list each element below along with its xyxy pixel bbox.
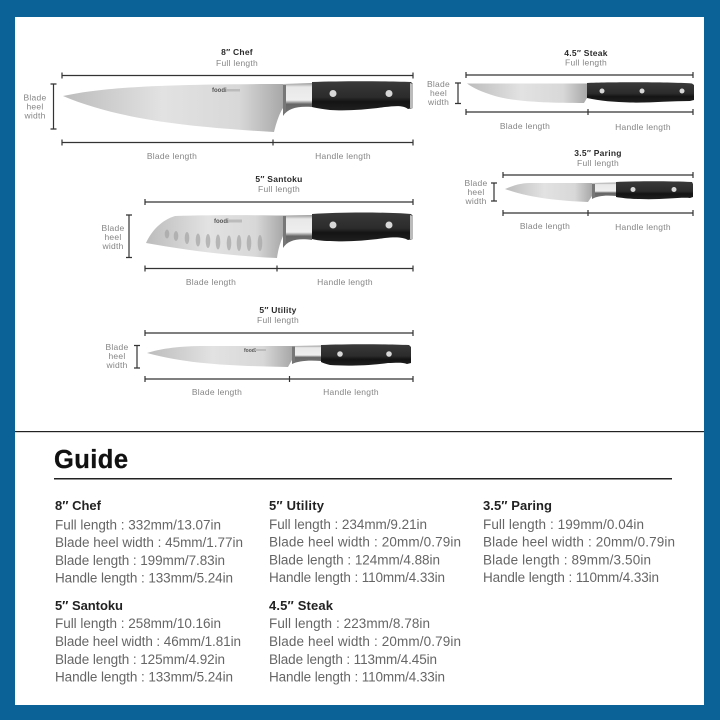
- guide block: 5" Santoku: Blade length : 125mm/4.92in: [55, 652, 225, 667]
- guide block: 5" Santoku: Handle length : 133mm/5.24in: [55, 670, 233, 684]
- label: blade heel width: heel: [108, 351, 126, 361]
- label: full length: Full length: [565, 58, 607, 68]
- dimension: blade and handle length: [145, 376, 413, 382]
- knife diagram: 5" Utility: [105, 305, 413, 397]
- title: 5" Utility: 5″ Utility: [259, 305, 297, 315]
- dimension: full length: [145, 199, 413, 205]
- dimension: full length: [466, 72, 693, 78]
- title: 4.5" Steak: 4.5″ Steak: [564, 48, 608, 58]
- label: blade heel width: Blade: [106, 342, 129, 352]
- guide block: 3.5" Paring: Full length : 199mm/0.04in: [483, 517, 644, 532]
- dimension: full length: [503, 172, 693, 178]
- guide block: 3.5" Paring: [483, 498, 675, 585]
- dimension: blade heel width: [50, 84, 56, 129]
- guide block: 4.5" Steak: Full length : 223mm/8.78in: [269, 616, 430, 631]
- guide block: 3.5" Paring: Blade heel width : 20mm/0.79in: [483, 534, 675, 550]
- knife diagram: 3.5" Paring: [464, 148, 693, 232]
- label: blade heel width: Blade: [102, 223, 125, 233]
- guide block: 5" Utility: Blade length : 124mm/4.88in: [269, 552, 440, 568]
- label: blade heel width: Blade: [464, 178, 488, 188]
- label: blade heel width: heel: [467, 187, 485, 197]
- guide block: 5" Santoku: Blade heel width : 46mm/1.81in: [55, 634, 241, 649]
- utility knife illustration: foodi: [244, 348, 257, 354]
- guide block: 5" Utility: Handle length : 110mm/4.33in: [269, 570, 445, 585]
- paring knife illustration: [505, 181, 693, 202]
- label: blade heel width: heel: [430, 88, 447, 98]
- label: blade heel width: width: [101, 241, 124, 251]
- guide block: 8" Chef: 8″ Chef: [55, 498, 102, 513]
- guide block: 8" Chef: Full length : 332mm/13.07in: [55, 518, 221, 532]
- dimension: full length: [62, 72, 413, 78]
- dimension: blade and handle length: [145, 266, 413, 272]
- label: full length: Full length: [216, 58, 258, 68]
- title: 8" Chef: 8″ Chef: [221, 47, 253, 57]
- label: blade heel width: [23, 92, 47, 120]
- guide block: 5" Santoku: [55, 598, 241, 684]
- guide block: 4.5" Steak: Handle length : 110mm/4.33in: [269, 670, 445, 684]
- title: 5" Santoku: 5″ Santoku: [255, 174, 303, 184]
- guide block: 8" Chef: Handle length : 133mm/5.24in: [55, 570, 233, 586]
- heading rule: [54, 478, 672, 480]
- label: blade heel width: width: [464, 196, 487, 206]
- guide block: 8" Chef: Blade heel width : 45mm/1.77in: [55, 535, 243, 550]
- dimension: blade and handle length: [503, 210, 693, 216]
- label: handle length: Handle length: [317, 277, 373, 287]
- label: blade length: Blade length: [520, 221, 570, 231]
- heading: Guide: Guide: [54, 446, 128, 474]
- guide block: 5" Santoku: Full length : 258mm/10.16in: [55, 616, 221, 631]
- label: blade heel width: width: [427, 97, 449, 107]
- label: blade heel width: [101, 223, 125, 251]
- label: blade heel width: heel: [104, 232, 122, 242]
- label: full length: Full length: [577, 158, 619, 168]
- label: blade length: Blade length: [186, 277, 236, 287]
- label: blade heel width: [464, 178, 488, 206]
- santoku knife illustration: foodi: [214, 219, 229, 225]
- chef knife illustration: foodi: [212, 88, 227, 94]
- label: handle length: Handle length: [315, 151, 371, 161]
- title: 3.5" Paring: 3.5″ Paring: [574, 148, 622, 158]
- label: full length: Full length: [257, 315, 299, 325]
- utility knife illustration: [147, 344, 411, 367]
- guide block: 5" Utility: Blade heel width : 20mm/0.79in: [269, 534, 461, 550]
- label: blade heel width: Blade: [427, 79, 450, 89]
- dimension: blade heel width: [126, 215, 132, 258]
- dimension: blade heel width: [491, 183, 497, 201]
- guide block: 4.5" Steak: Blade heel width : 20mm/0.79in: [269, 634, 461, 649]
- dimension: blade and handle length: [62, 140, 413, 146]
- label: blade heel width: width: [23, 110, 46, 120]
- guide block: 3.5" Paring: Blade length : 89mm/3.50in: [483, 552, 651, 568]
- label: handle length: Handle length: [615, 222, 671, 232]
- guide block: 4.5" Steak: Blade length : 113mm/4.45in: [269, 652, 437, 667]
- label: blade heel width: Blade: [24, 92, 47, 102]
- label: blade length: Blade length: [147, 151, 197, 161]
- guide block: 4.5" Steak: [269, 598, 461, 684]
- label: full length: Full length: [258, 184, 300, 194]
- label: blade heel width: width: [105, 360, 128, 370]
- steak knife illustration: [467, 82, 694, 103]
- label: handle length: Handle length: [323, 387, 379, 397]
- dimension: blade and handle length: [466, 109, 693, 115]
- label: blade heel width: [105, 342, 129, 370]
- guide block: 5" Utility: [269, 498, 461, 585]
- label: blade heel width: heel: [26, 102, 44, 112]
- guide block: 3.5" Paring: Handle length : 110mm/4.33in: [483, 570, 659, 585]
- guide block: 8" Chef: Blade length : 199mm/7.83in: [55, 553, 225, 568]
- chef knife illustration: [63, 81, 413, 132]
- guide block: 4.5" Steak: 4.5″ Steak: [269, 598, 334, 613]
- guide block: 3.5" Paring: 3.5″ Paring: [483, 498, 552, 513]
- label: blade heel width: [427, 79, 450, 107]
- knife diagram: 5" Santoku: [101, 174, 413, 287]
- guide block: 8" Chef: [55, 498, 243, 586]
- guide block: 5" Utility: Full length : 234mm/9.21in: [269, 517, 427, 532]
- section divider: [15, 431, 704, 432]
- santoku knife illustration: [146, 212, 413, 258]
- dimension: blade heel width: [134, 346, 140, 368]
- label: blade length: Blade length: [192, 387, 242, 397]
- knife diagram: 8" Chef: [23, 47, 413, 161]
- label: handle length: Handle length: [615, 122, 671, 132]
- guide block: 5" Utility: 5″ Utility: [269, 498, 325, 513]
- dimension: blade heel width: [455, 83, 461, 104]
- guide block: 5" Santoku: 5″ Santoku: [55, 598, 123, 613]
- knife diagram: 4.5" Steak: [427, 48, 694, 132]
- label: blade length: Blade length: [500, 121, 550, 131]
- dimension: full length: [145, 330, 413, 336]
